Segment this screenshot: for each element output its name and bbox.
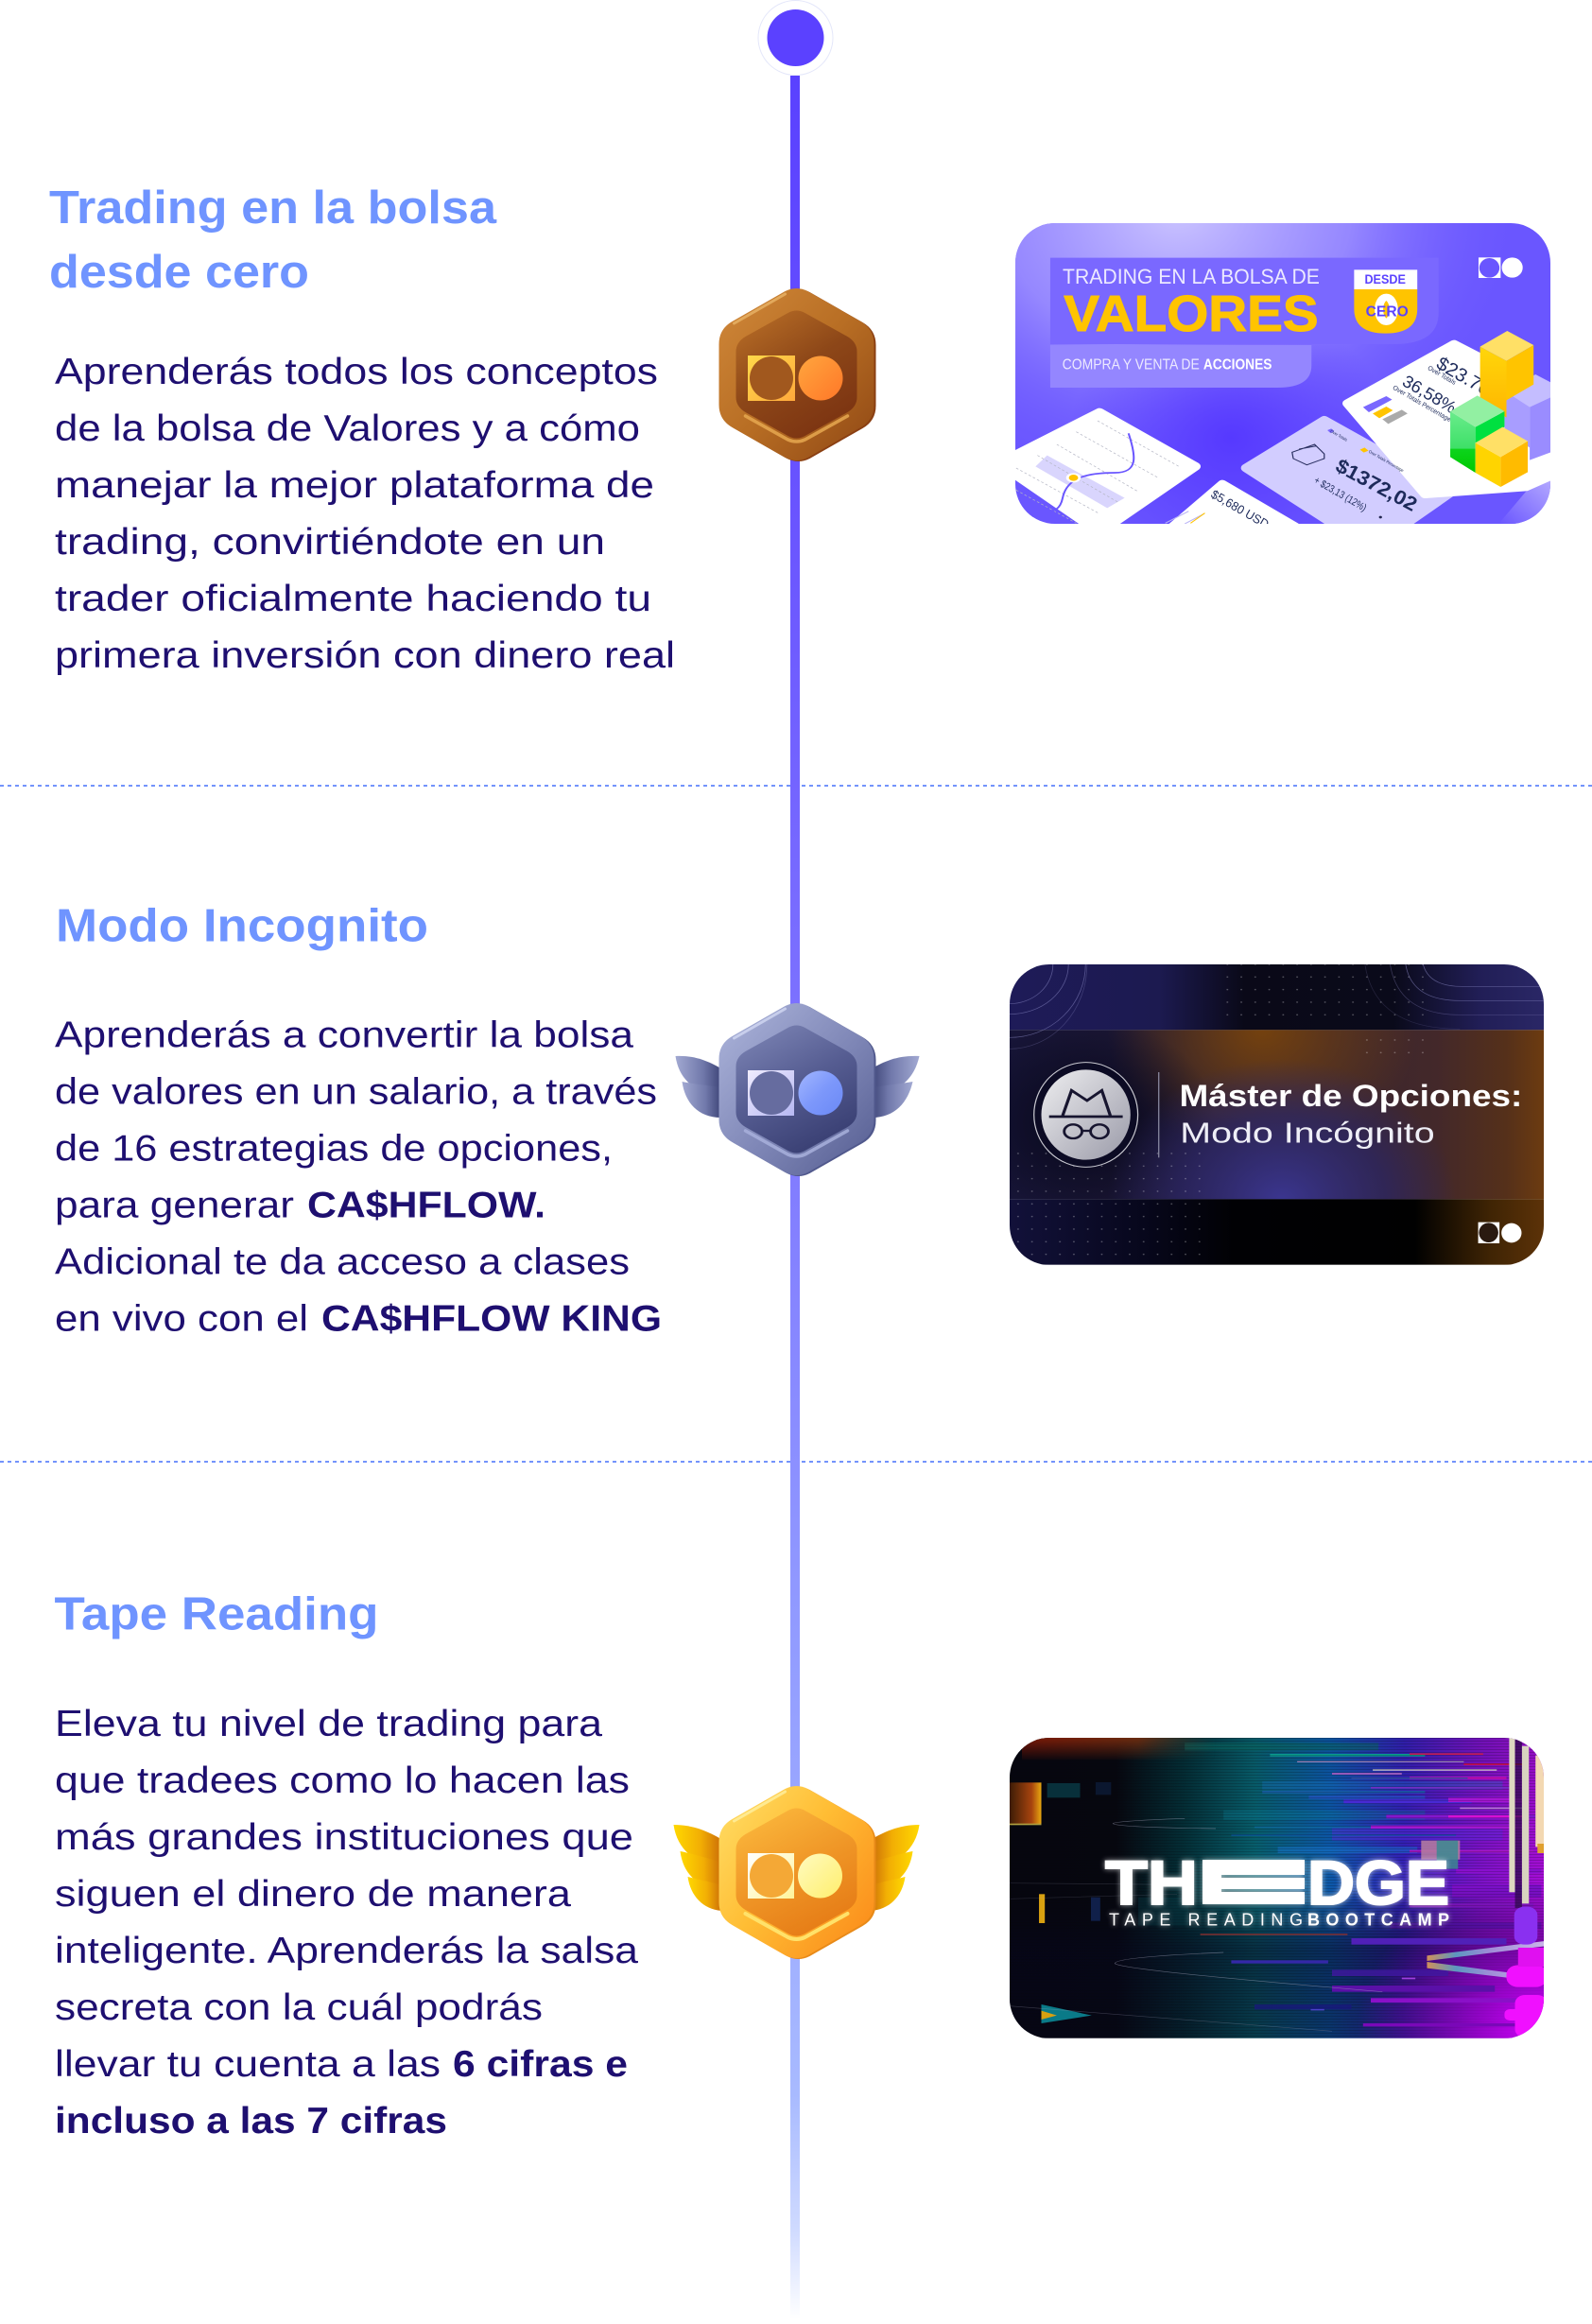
heading text: ACCIONES	[1203, 356, 1272, 373]
section 3 title: Tape Reading	[55, 1588, 378, 1639]
dotted divider: section two and three	[0, 1461, 1592, 1463]
icon: bronze medal	[718, 288, 875, 461]
section 2 title: Modo Incognito	[56, 900, 428, 951]
section 1 title	[49, 182, 497, 298]
dotted divider: section one and two	[0, 785, 1592, 787]
section 3 body text	[55, 1704, 639, 2142]
rotated figures on panels	[1211, 357, 1480, 524]
section 2 body text: CA$HFLOW KING	[321, 1299, 662, 1339]
section 2 body text: para generar	[55, 1186, 294, 1225]
section 1 body text: manejar la mejor plataforma de	[55, 465, 654, 506]
section 2 body text	[55, 1015, 662, 1339]
section 3 body text: secreta con la cuál podrás	[55, 1987, 543, 2028]
glitch blocks	[1010, 1782, 1092, 2023]
section 3 body text: inteligente. Aprenderás la salsa	[55, 1931, 639, 1971]
icon: gold winged medal	[673, 1786, 919, 1959]
The Edge wordmark: TH	[1105, 1847, 1198, 1917]
section 2 body text: en vivo con el	[55, 1299, 308, 1339]
section 1 title: desde cero	[49, 247, 309, 298]
card title	[1179, 1079, 1522, 1149]
left wing	[673, 1825, 722, 1911]
heading text: TRADING EN LA BOLSA DE	[1063, 265, 1320, 288]
heading text: COMPRA Y VENTA DE	[1063, 356, 1200, 373]
section 2 body text: de 16 estrategias de opciones,	[55, 1129, 613, 1169]
glitch streaks	[1185, 1743, 1541, 1929]
section 1 body text	[55, 352, 675, 676]
section 3 body text: 6 cifras e	[453, 2044, 628, 2085]
section 2 body text: de valores en un salario, a través	[55, 1072, 657, 1112]
concentric arcs	[1010, 964, 1544, 1049]
rotated figures on panels: Over Totals	[1329, 428, 1349, 442]
section 1 title: Trading en la bolsa	[49, 182, 497, 234]
vertical stripes	[1509, 1738, 1548, 1908]
isometric cubes	[1450, 331, 1555, 487]
card title: Máster de Opciones:	[1179, 1079, 1522, 1113]
The Edge wordmark	[1105, 1847, 1449, 1929]
dot grids	[1012, 964, 1425, 1265]
right wing	[870, 1825, 919, 1911]
thin curves	[1010, 1818, 1382, 2031]
right wing	[872, 1056, 919, 1118]
The Edge wordmark: BOOTCAMP	[1307, 1910, 1449, 1929]
section 2 body text: CA$HFLOW.	[307, 1186, 545, 1225]
card: Trading en la bolsa de valores	[1015, 223, 1550, 524]
left wing	[675, 1056, 720, 1118]
rotated figures on panels: Over Totals	[1427, 365, 1457, 387]
section 2 body text: Aprenderás a convertir la bolsa	[55, 1015, 634, 1055]
panel: balance	[1240, 416, 1454, 524]
rotated figures on panels: 36,58%	[1399, 372, 1460, 417]
card: Máster de Opciones, Modo Incógnito	[1010, 964, 1544, 1265]
section 1 body text: Aprenderás todos los conceptos	[55, 352, 658, 392]
title band	[1050, 258, 1439, 344]
logo	[1479, 257, 1523, 278]
glitch wedge	[1427, 1941, 1544, 1978]
badge: desde cero: CERO	[1366, 303, 1409, 320]
rotated figures on panels: Over Totals Percentage	[1392, 385, 1452, 424]
The Edge wordmark: TAPE READING	[1109, 1910, 1303, 1929]
panel: totals	[1347, 344, 1557, 494]
rotated figures on panels: $23.70	[1433, 353, 1494, 401]
section 3 body text: incluso a las 7 cifras	[55, 2101, 447, 2142]
icon: silver winged medal	[675, 1003, 919, 1176]
card title: Modo Incógnito	[1180, 1118, 1435, 1149]
card: The Edge tape reading bootcamp	[1010, 1738, 1549, 2038]
section 1 body text: trading, convirtiéndote en un	[55, 522, 605, 563]
rotated figures on panels: Over Totals Percentage	[1368, 449, 1405, 473]
section 3 body text: Eleva tu nivel de trading para	[55, 1704, 603, 1744]
section 3 body text: siguen el dinero de manera	[55, 1874, 572, 1915]
icon: incognito	[1034, 1063, 1138, 1167]
section 1 body text: primera inversión con dinero real	[55, 635, 675, 676]
section 3 body text: más grandes instituciones que	[55, 1817, 633, 1858]
section 1 body text: trader oficialmente haciendo tu	[55, 579, 651, 619]
badge: desde cero	[1354, 269, 1417, 334]
heading text	[1063, 265, 1320, 373]
section 1 body text: de la bolsa de Valores y a cómo	[55, 408, 640, 449]
timeline vertical line	[790, 76, 800, 2319]
timeline start dot	[758, 0, 833, 76]
panel: price table	[1165, 480, 1299, 524]
rotated figures on panels: $5,680 USD	[1209, 487, 1272, 531]
logo	[1479, 1223, 1521, 1243]
lower streaks	[1091, 1782, 1533, 2026]
heading text: VALORES	[1064, 286, 1319, 342]
subtitle band	[1050, 345, 1311, 388]
section 3 body text: llevar tu cuenta a las	[55, 2044, 441, 2085]
panel: line chart	[998, 412, 1196, 532]
section 2 body text: Adicional te da acceso a clases	[55, 1242, 630, 1282]
section 3 body text: que tradees como lo hacen las	[55, 1760, 630, 1801]
badge: desde cero: DESDE	[1364, 272, 1406, 287]
magenta currency shapes	[1504, 1907, 1548, 2038]
The Edge wordmark: DGE	[1307, 1847, 1449, 1917]
rotated figures on panels: $1372,02	[1332, 455, 1421, 516]
rotated figures on panels: + $23,13 (12%)	[1312, 475, 1368, 514]
